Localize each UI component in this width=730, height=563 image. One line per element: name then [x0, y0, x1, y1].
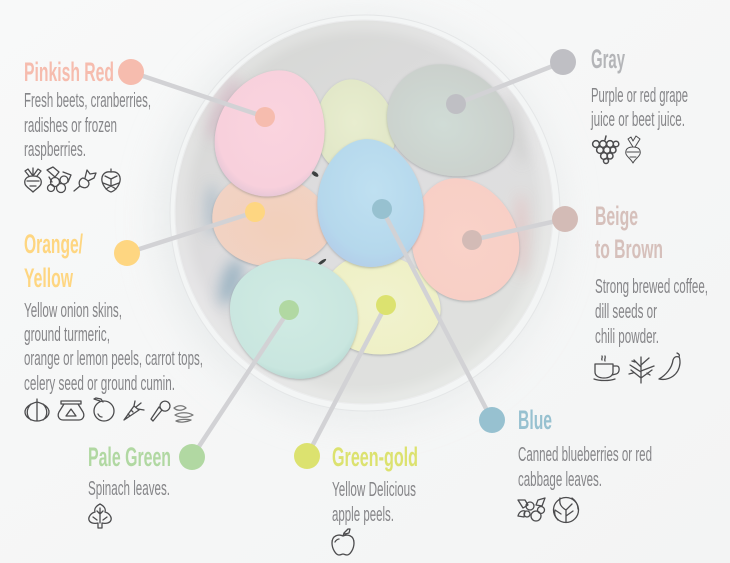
description: Fresh beets, cranberries, — [24, 90, 151, 112]
description: Yellow onion skins, — [24, 300, 122, 322]
heading: Blue — [518, 405, 552, 435]
egg: gray — [369, 46, 533, 198]
icons: grapes, beet — [593, 136, 640, 164]
description: radishes or frozen — [24, 115, 117, 137]
egg: cream top — [307, 73, 403, 181]
egg dot — [372, 199, 392, 219]
description: apple peels. — [332, 504, 394, 526]
photo: bowl of dyed eggs — [158, 15, 560, 418]
egg dot — [462, 230, 482, 250]
description: raspberries. — [24, 139, 86, 161]
leader line — [382, 209, 492, 420]
egg dot — [376, 295, 396, 315]
egg: pale yellow — [313, 245, 449, 365]
egg dot — [245, 202, 265, 222]
description: Spinach leaves. — [88, 478, 170, 500]
egg: pink — [200, 55, 342, 211]
icons: beet, cranberries, radish, raspberry — [25, 167, 120, 192]
description — [590, 85, 688, 131]
description — [518, 444, 652, 491]
heading: Orange/ — [24, 229, 83, 259]
icons: onion, spice bowl, orange, carrot, celery, seeds — [25, 398, 193, 422]
leader line — [472, 219, 565, 240]
description: celery seed or ground cumin. — [24, 373, 175, 395]
icons: blueberries, cabbage — [518, 498, 578, 522]
callout: Pale Green — [88, 300, 299, 528]
icon: spinach — [89, 504, 111, 528]
bowl interior shadows — [177, 20, 530, 310]
icon: apple — [332, 529, 354, 555]
callout: Blue — [372, 199, 652, 522]
heading: Pinkish Red — [24, 57, 114, 87]
leader line — [192, 310, 289, 457]
outer dot — [294, 443, 320, 469]
heading: Gray — [591, 44, 625, 74]
bowl cast shadow — [158, 18, 558, 418]
egg: tan left — [205, 165, 339, 277]
description: cabbage leaves. — [518, 469, 602, 491]
heading: Green-gold — [332, 442, 418, 472]
bowl rim — [170, 15, 560, 411]
description: dill seeds or — [595, 301, 657, 323]
outer dot — [479, 407, 505, 433]
heading: Yellow — [24, 263, 74, 293]
description: chili powder. — [595, 326, 659, 348]
description — [595, 276, 708, 348]
heading: Beige — [595, 201, 638, 231]
description — [24, 300, 203, 395]
outer dot — [118, 59, 144, 85]
outer dot — [550, 49, 576, 75]
leader line — [456, 62, 563, 104]
heading: Pale Green — [88, 442, 171, 472]
heading — [24, 229, 83, 293]
description — [24, 90, 151, 161]
leader line — [131, 72, 265, 117]
egg dot — [446, 94, 466, 114]
gaps between eggs — [311, 170, 327, 266]
leader line — [307, 305, 386, 456]
egg dot — [279, 300, 299, 320]
leader line — [127, 212, 255, 253]
callout: Green-gold — [294, 295, 418, 555]
bowl interior — [175, 20, 553, 404]
icons: coffee cup, dill, chili — [594, 353, 680, 383]
egg: blue — [311, 134, 429, 272]
egg: mint — [209, 236, 377, 398]
heading — [595, 201, 663, 264]
callout: Beige to Brown — [462, 201, 708, 383]
description — [332, 479, 416, 526]
egg: peach — [394, 164, 534, 314]
outer dot — [552, 206, 578, 232]
egg dot — [255, 107, 275, 127]
outer dot — [179, 444, 205, 470]
heading: to Brown — [595, 234, 663, 264]
outer dot — [114, 240, 140, 266]
callout: Pinkish Red — [24, 57, 275, 192]
description: orange or lemon peels, carrot tops, — [24, 348, 203, 370]
callout: Gray — [446, 44, 688, 164]
callout: Orange/Yellow — [24, 202, 265, 422]
description: Yellow Delicious — [332, 479, 416, 501]
description: ground turmeric, — [24, 324, 110, 346]
